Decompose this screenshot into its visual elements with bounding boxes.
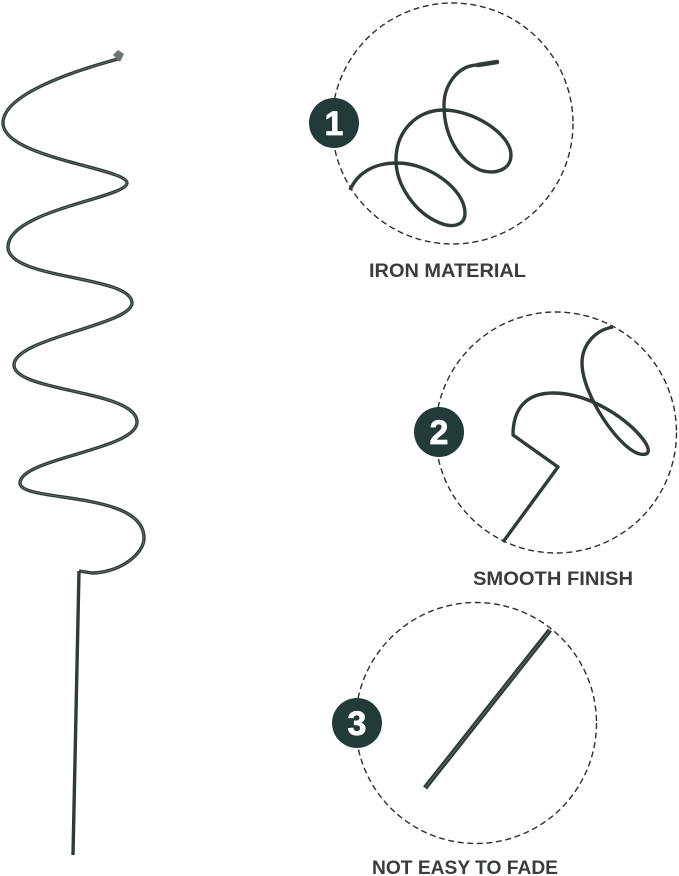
wire detail 1 <box>350 62 511 226</box>
dashed circle 3 <box>356 602 596 844</box>
caption 1: IRON MATERIAL <box>369 261 526 282</box>
panel: smooth finish <box>414 312 676 590</box>
spiral plant support <box>3 50 144 855</box>
spiral coil <box>3 59 144 573</box>
straight stem <box>73 571 79 855</box>
wire detail 2 <box>503 327 648 542</box>
badge 2: 2 <box>430 414 448 452</box>
panel: iron material <box>309 3 573 282</box>
panel: not easy to fade <box>332 602 596 876</box>
dashed circle 1 <box>332 3 573 244</box>
coil tip <box>113 50 124 62</box>
caption 2: SMOOTH FINISH <box>473 569 633 590</box>
dashed circle 2 <box>436 312 676 553</box>
badge 3: 3 <box>348 705 366 743</box>
badge 3 <box>332 698 382 748</box>
badge 2 <box>414 407 464 457</box>
badge 1: 1 <box>325 105 343 143</box>
badge 1 <box>309 98 359 148</box>
wire detail 3 <box>425 630 550 788</box>
